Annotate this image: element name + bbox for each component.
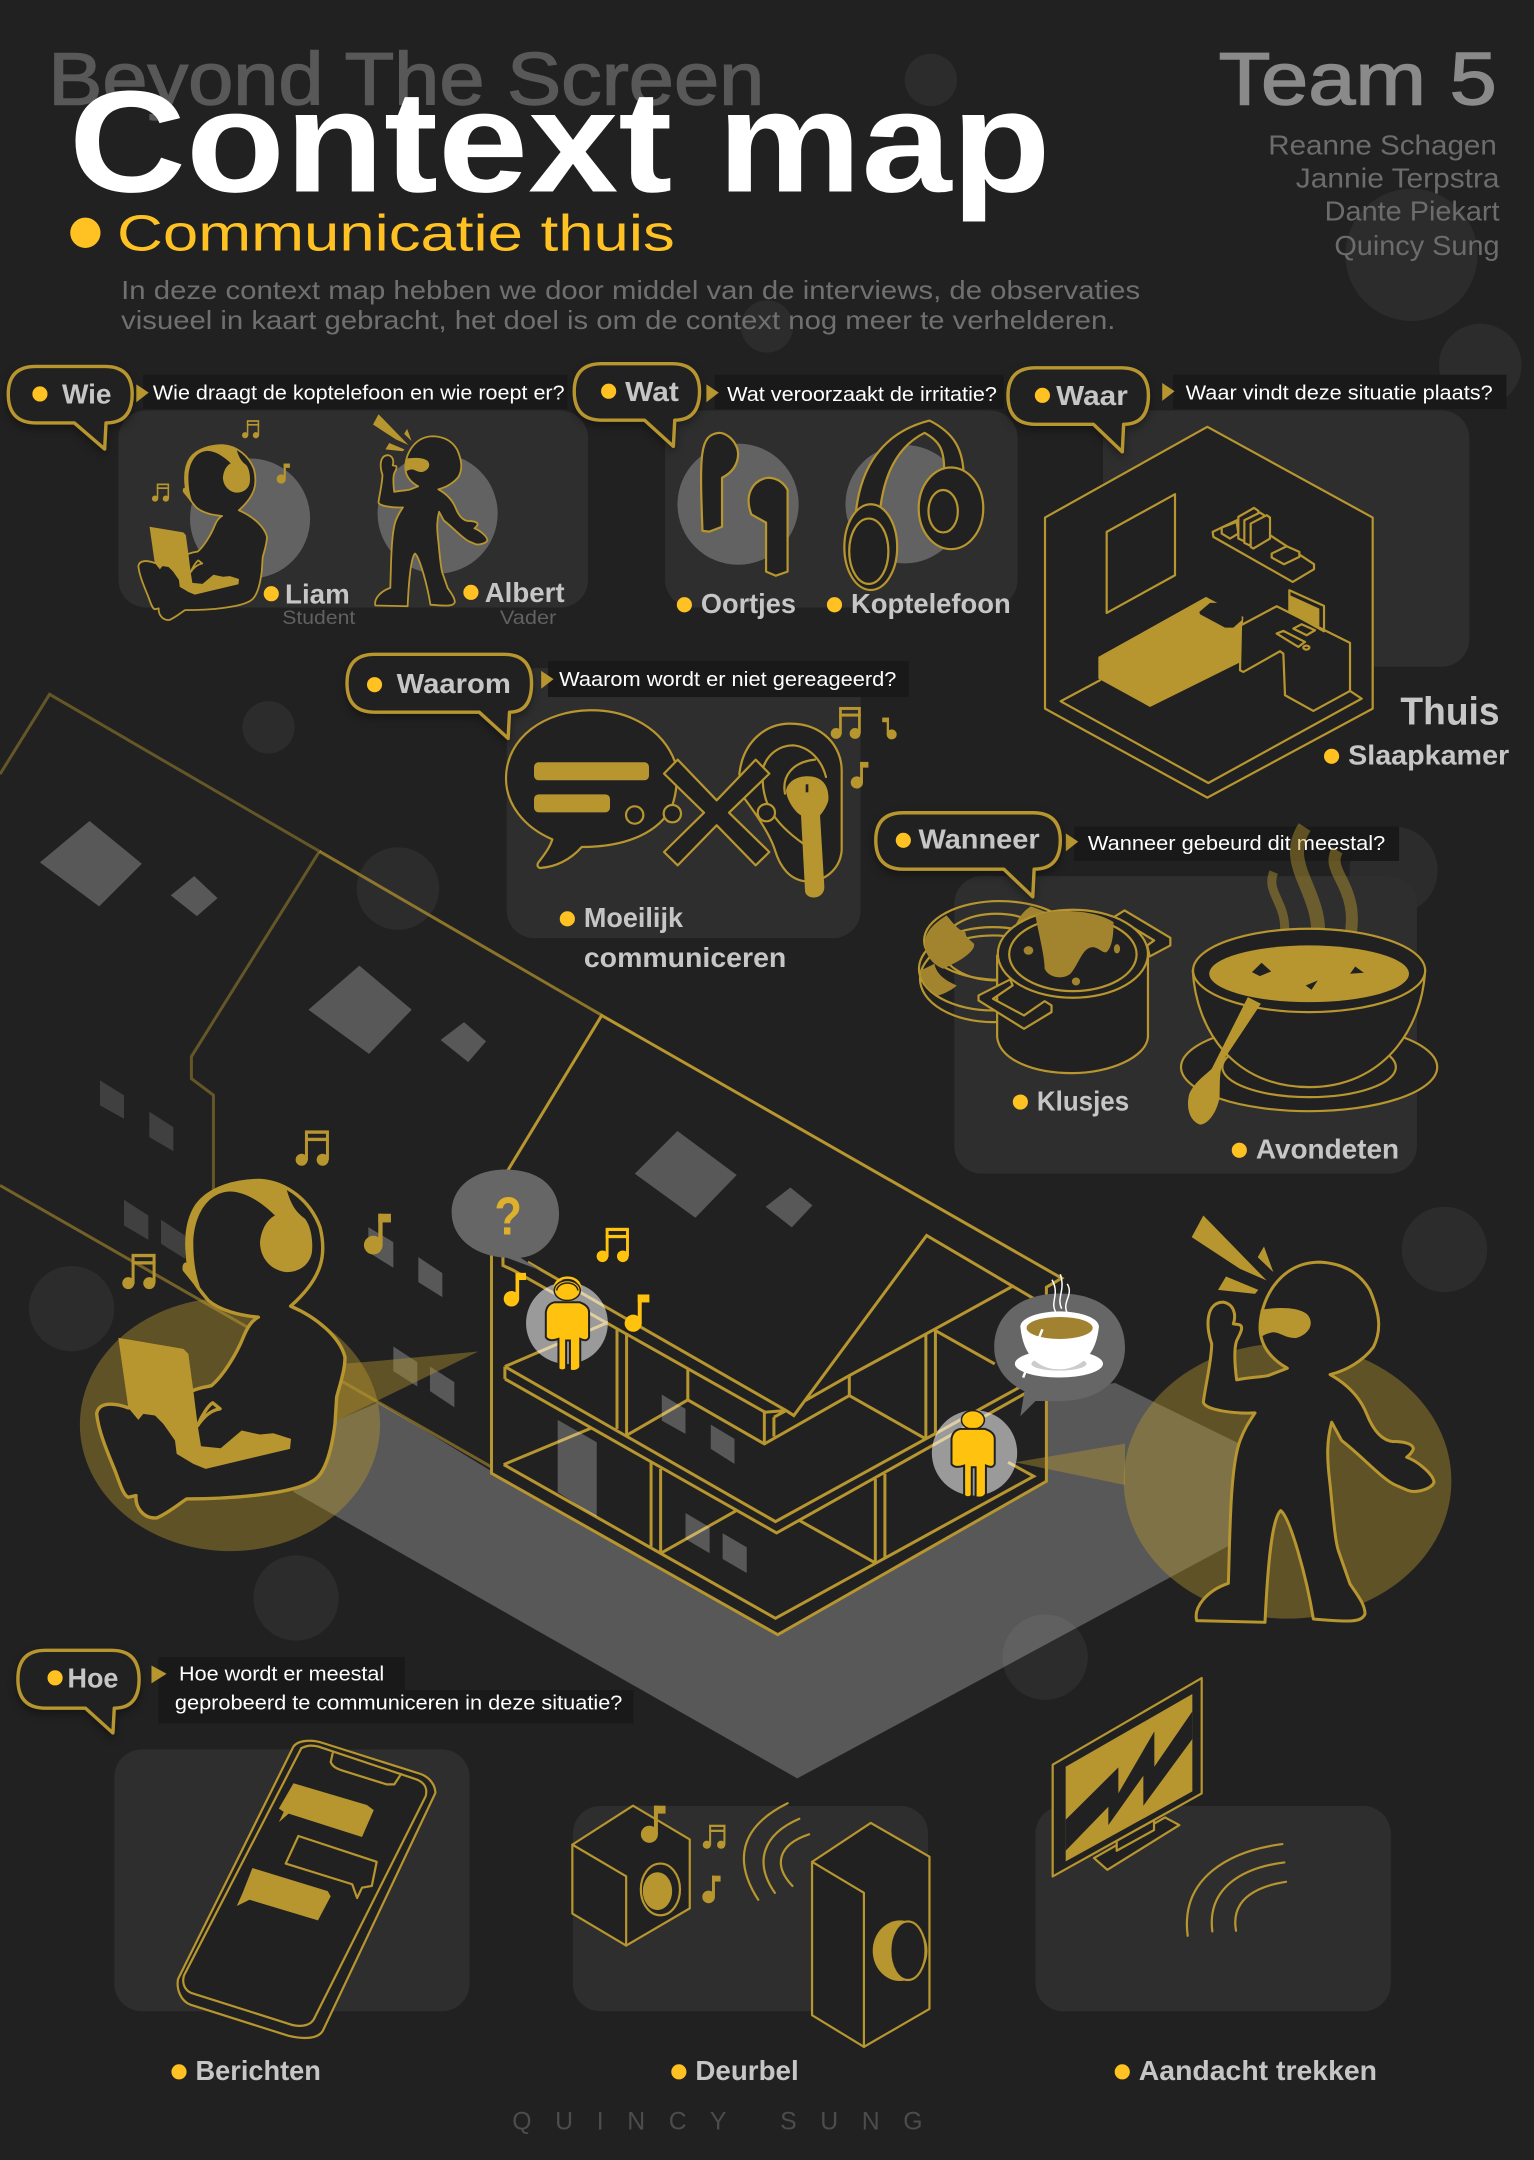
person upstairs with headphones xyxy=(526,1278,608,1371)
label: Aandacht trekken: Aandacht trekken xyxy=(1139,2055,1377,2086)
label: Liam: Liam xyxy=(285,578,350,609)
bubble: Wanneer: Wanneer xyxy=(918,824,1040,855)
label: Moeilijk communiceren: communiceren xyxy=(584,942,786,973)
panel: wat xyxy=(665,411,1018,608)
beam of light xyxy=(293,1383,1239,1778)
panel: wanneer xyxy=(954,876,1417,1174)
question: Hoe: geprobeerd te communiceren in deze situatie? xyxy=(175,1693,622,1715)
bubble: Wat xyxy=(574,364,700,446)
intro text: visueel in kaart gebracht, het doel is om de context nog meer te verhelderen. xyxy=(121,305,1115,335)
footer credit: Q U I N C Y S U N G xyxy=(512,2109,923,2136)
label: Albert xyxy=(463,577,565,629)
panel: waarom xyxy=(507,668,861,938)
label: Berichten: Berichten xyxy=(196,2055,321,2086)
person downstairs xyxy=(932,1410,1017,1498)
beam wedge right xyxy=(1015,1444,1125,1485)
bubble: question mark: ? xyxy=(494,1186,522,1246)
label: Oortjes: Oortjes xyxy=(701,588,796,619)
bubble: question mark xyxy=(452,1170,559,1270)
icon: Albert shouting xyxy=(373,414,498,606)
label: Koptelefoon: Koptelefoon xyxy=(851,588,1011,619)
question: Wie xyxy=(136,375,567,409)
label: Thuis Slaapkamer: Slaapkamer xyxy=(1348,740,1509,771)
big circle left xyxy=(80,1298,380,1551)
label: Thuis Slaapkamer xyxy=(1324,691,1509,771)
team names: Reanne Schagen xyxy=(1268,129,1497,160)
panel: hoe aandacht xyxy=(1036,1806,1391,2011)
label: Klusjes: Klusjes xyxy=(1037,1085,1129,1116)
team names xyxy=(1268,129,1500,261)
team names: Dante Piekart xyxy=(1325,195,1500,226)
title: Context map: Context map xyxy=(69,60,1051,222)
background circles xyxy=(29,54,1522,1641)
bubble: Waarom xyxy=(347,654,532,738)
bubble: Waar: Waar xyxy=(1056,380,1128,411)
label: Liam: Student xyxy=(282,608,356,629)
question: Hoe: Hoe wordt er meestal xyxy=(179,1664,384,1686)
icon: soup bowl xyxy=(1181,827,1437,1125)
isometric house xyxy=(491,1015,1062,1635)
question: Waar xyxy=(1162,375,1506,409)
question: Waar: Waar vindt deze situatie plaats? xyxy=(1186,382,1493,404)
panel: hoe berichten xyxy=(114,1749,470,2011)
roof windows xyxy=(635,1131,812,1227)
panel: waar xyxy=(1103,411,1469,667)
bubble: Wanneer xyxy=(876,813,1060,897)
label: Thuis Slaapkamer: Thuis xyxy=(1400,691,1500,734)
question: Hoe xyxy=(151,1657,633,1723)
figure: big Liam xyxy=(97,1180,345,1518)
label: Moeilijk communiceren xyxy=(560,902,786,973)
big circle right xyxy=(1124,1343,1451,1619)
label: Avondeten: Avondeten xyxy=(1256,1134,1399,1165)
label: Moeilijk communiceren: Moeilijk xyxy=(584,902,684,933)
bubble: Waar xyxy=(1008,368,1148,452)
yellow music notes xyxy=(504,1228,649,1332)
label: Albert: Albert xyxy=(485,577,565,608)
dim roof line xyxy=(0,1185,492,1467)
question: Wat: Wat veroorzaakt de irritatie? xyxy=(727,384,997,406)
icon: phone with messages xyxy=(178,1741,435,2038)
bubble: soup cup xyxy=(994,1274,1125,1416)
figure: big Albert xyxy=(1192,1215,1434,1622)
music notes around Liam xyxy=(122,1130,391,1289)
beam wedge left xyxy=(337,1352,478,1421)
intro text xyxy=(121,275,1140,335)
subtitle: Beyond The Screen: Beyond The Screen xyxy=(48,38,764,121)
icon: doorbell speakers xyxy=(572,1803,929,2047)
icon: headphones xyxy=(844,421,983,590)
icon: earbuds xyxy=(677,433,799,576)
team names: Jannie Terpstra xyxy=(1296,162,1500,193)
house scene background roofs xyxy=(0,694,602,1407)
label: Albert: Vader xyxy=(500,608,557,629)
icon: isometric bedroom xyxy=(1045,427,1373,798)
bubble: Wie xyxy=(8,366,132,449)
question: Waarom xyxy=(541,661,909,697)
icon: flashing TV and waves xyxy=(1053,1678,1286,1936)
question: Wanneer xyxy=(1066,827,1399,861)
heading: Communicatie thuis: Communicatie thuis xyxy=(117,205,675,262)
bubble: Hoe: Hoe xyxy=(67,1662,118,1694)
bubble: Wie: Wie xyxy=(62,379,112,410)
icon: Liam with headphones xyxy=(138,420,310,620)
team names: Quincy Sung xyxy=(1334,230,1500,261)
team heading: Team 5 xyxy=(1219,38,1497,121)
background circle overlapping beam xyxy=(1002,1614,1088,1700)
question: Waarom: Waarom wordt er niet gereageerd? xyxy=(559,669,896,691)
icon: pots and pans xyxy=(919,901,1170,1073)
bubble: Waarom: Waarom xyxy=(397,668,511,699)
icon: difficult communication xyxy=(506,707,897,897)
label: Liam xyxy=(264,578,356,629)
question: Wanneer: Wanneer gebeurd dit meestal? xyxy=(1088,833,1385,855)
panel: wie xyxy=(118,411,588,608)
label: Deurbel: Deurbel xyxy=(695,2055,799,2086)
panel: hoe deurbel xyxy=(573,1806,928,2011)
bubble: Wat: Wat xyxy=(625,376,679,407)
question: Wie: Wie draagt de koptelefoon en wie roept er? xyxy=(153,382,565,404)
question: Wat xyxy=(706,375,1004,409)
intro text: In deze context map hebben we door middel van de interviews, de observaties xyxy=(121,275,1140,305)
bubble: Hoe xyxy=(18,1650,139,1733)
